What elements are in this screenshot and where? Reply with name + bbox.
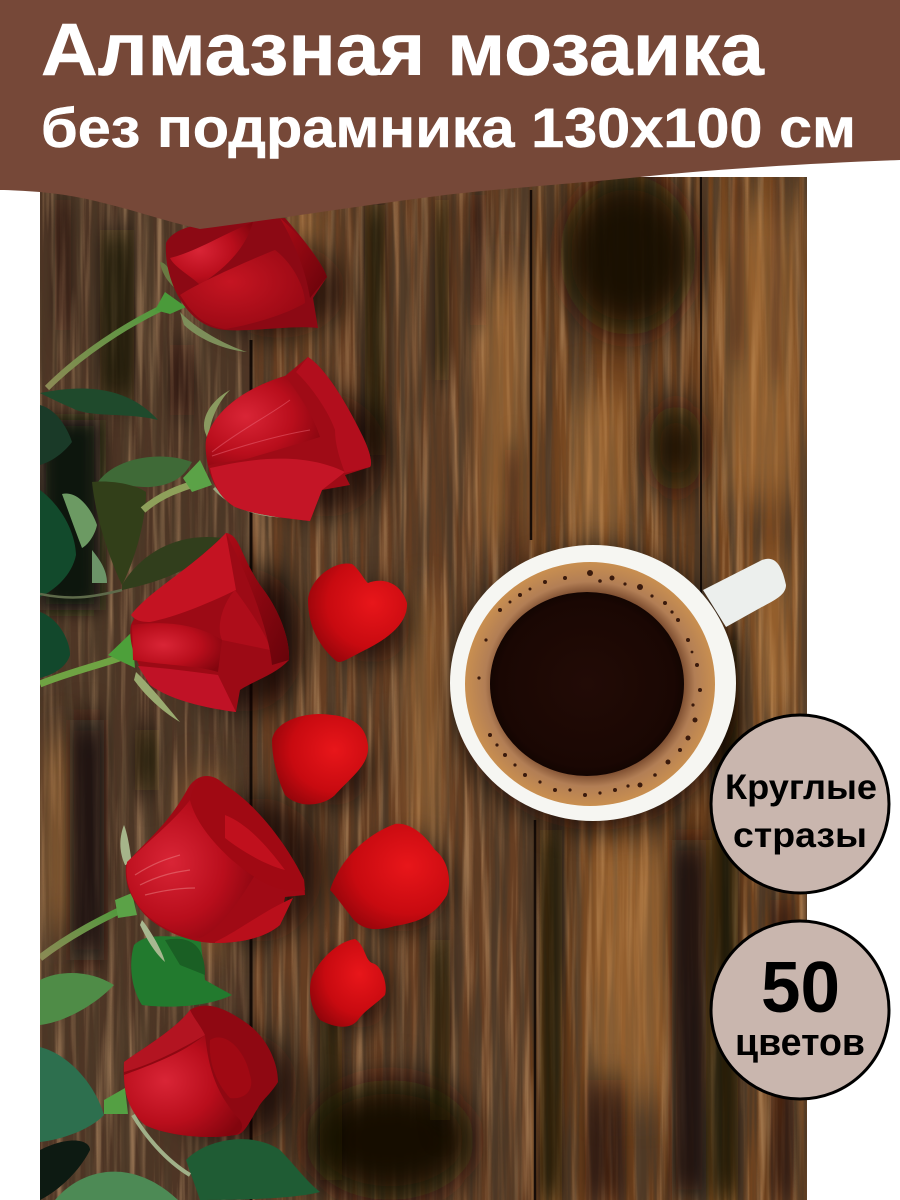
stem — [40, 655, 128, 684]
title: Алмазная мозаика — [41, 8, 765, 91]
rose petal: left — [272, 714, 368, 804]
header banner — [0, 0, 900, 229]
stem — [143, 482, 200, 510]
stem — [104, 1088, 128, 1114]
stem — [47, 305, 168, 388]
badge: 50 colours — [711, 921, 889, 1099]
badge: 50 colours: 50 — [761, 948, 840, 1028]
badge: round rhinestones: стразы — [733, 816, 867, 855]
cup body — [450, 545, 736, 821]
rose 5 — [104, 1006, 278, 1175]
stem — [40, 908, 125, 958]
subtitle: без подрамника 130х100 см — [41, 96, 856, 159]
rose petal: large — [330, 824, 449, 929]
black coffee — [490, 592, 684, 776]
photo: roses and coffee on wooden table — [40, 175, 807, 1200]
rose petal: small — [310, 939, 386, 1027]
shadows under roses and petals — [173, 242, 739, 1140]
rose 4 — [40, 776, 305, 962]
badge: round rhinestones: Круглые — [725, 768, 877, 807]
badge: round rhinestones — [711, 715, 889, 893]
wooden table — [40, 175, 807, 1200]
rose 3 — [40, 533, 289, 722]
coffee cup — [450, 545, 786, 821]
rose 2 — [143, 357, 371, 521]
rose 1 — [47, 218, 327, 388]
crema bubbles — [477, 570, 702, 797]
rose petal: heart — [308, 563, 407, 662]
cup handle — [703, 559, 786, 627]
leaves — [40, 388, 320, 1200]
badge: 50 colours: цветов — [735, 1022, 865, 1064]
coffee crema — [465, 562, 715, 806]
